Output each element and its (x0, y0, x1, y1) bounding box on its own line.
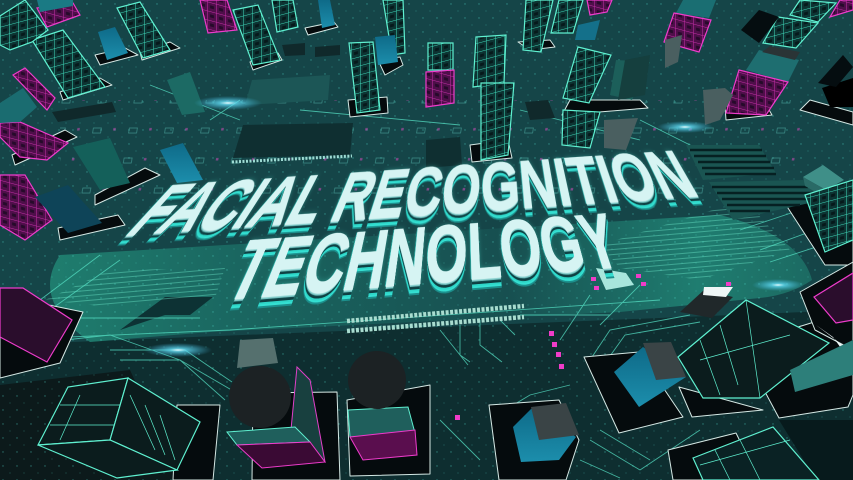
teal wire cube bottom left base (173, 405, 220, 480)
teal wire cube right (678, 300, 829, 398)
bottom right wire cube (693, 427, 819, 480)
pad mark texture (60, 100, 800, 210)
bottom far right dark block (779, 420, 853, 480)
pale pad under Y (596, 268, 634, 290)
white bar (816, 325, 853, 365)
lower left magenta cube (0, 288, 72, 362)
lower dark board (0, 310, 853, 480)
cylinder cube 2 base (347, 385, 430, 476)
memory strips (347, 306, 524, 331)
base far right dark (740, 310, 853, 418)
machinery right (790, 340, 853, 392)
right top wire cube (805, 180, 853, 252)
bottom right base (668, 433, 759, 480)
plate trace bands right (600, 200, 790, 280)
dark hex blocks (120, 297, 213, 330)
right magenta block (814, 273, 853, 323)
magenta cubes (0, 0, 853, 240)
top teal wire buildings left (0, 0, 405, 190)
top teal wire buildings right (428, 0, 836, 160)
heatsinks (686, 145, 823, 220)
lower right base 1 with pillar (584, 342, 686, 433)
chip pins (232, 156, 352, 162)
cylinder cube 1 (227, 338, 325, 468)
chip: upper middle (245, 75, 330, 105)
chip: right of centre (426, 137, 462, 168)
pink pads (455, 274, 731, 420)
teal wire cube bottom left (38, 378, 200, 478)
lower centre base 2 with pillar (489, 400, 579, 480)
cylinder cube 1 base (252, 392, 340, 480)
small chip cube right (803, 165, 844, 198)
blue pillars (35, 0, 853, 233)
title line 2: TECHNOLOGY (210, 200, 632, 323)
plate trace bands left (45, 268, 225, 306)
title line 1: FACIAL RECOGNITION (106, 139, 711, 254)
cylinder cube 2 (348, 351, 417, 460)
crystal component (680, 287, 733, 318)
chip: large under title (233, 123, 353, 158)
lens flares (144, 96, 804, 357)
small dark ICs (52, 43, 555, 122)
gray cylinders (604, 35, 733, 150)
hologram title plate (50, 215, 812, 342)
right magenta block base (800, 262, 853, 350)
lower left magenta cube base (0, 295, 83, 378)
base right dark (679, 387, 763, 417)
black bases top (12, 22, 853, 265)
bottom left shadow (0, 370, 180, 480)
